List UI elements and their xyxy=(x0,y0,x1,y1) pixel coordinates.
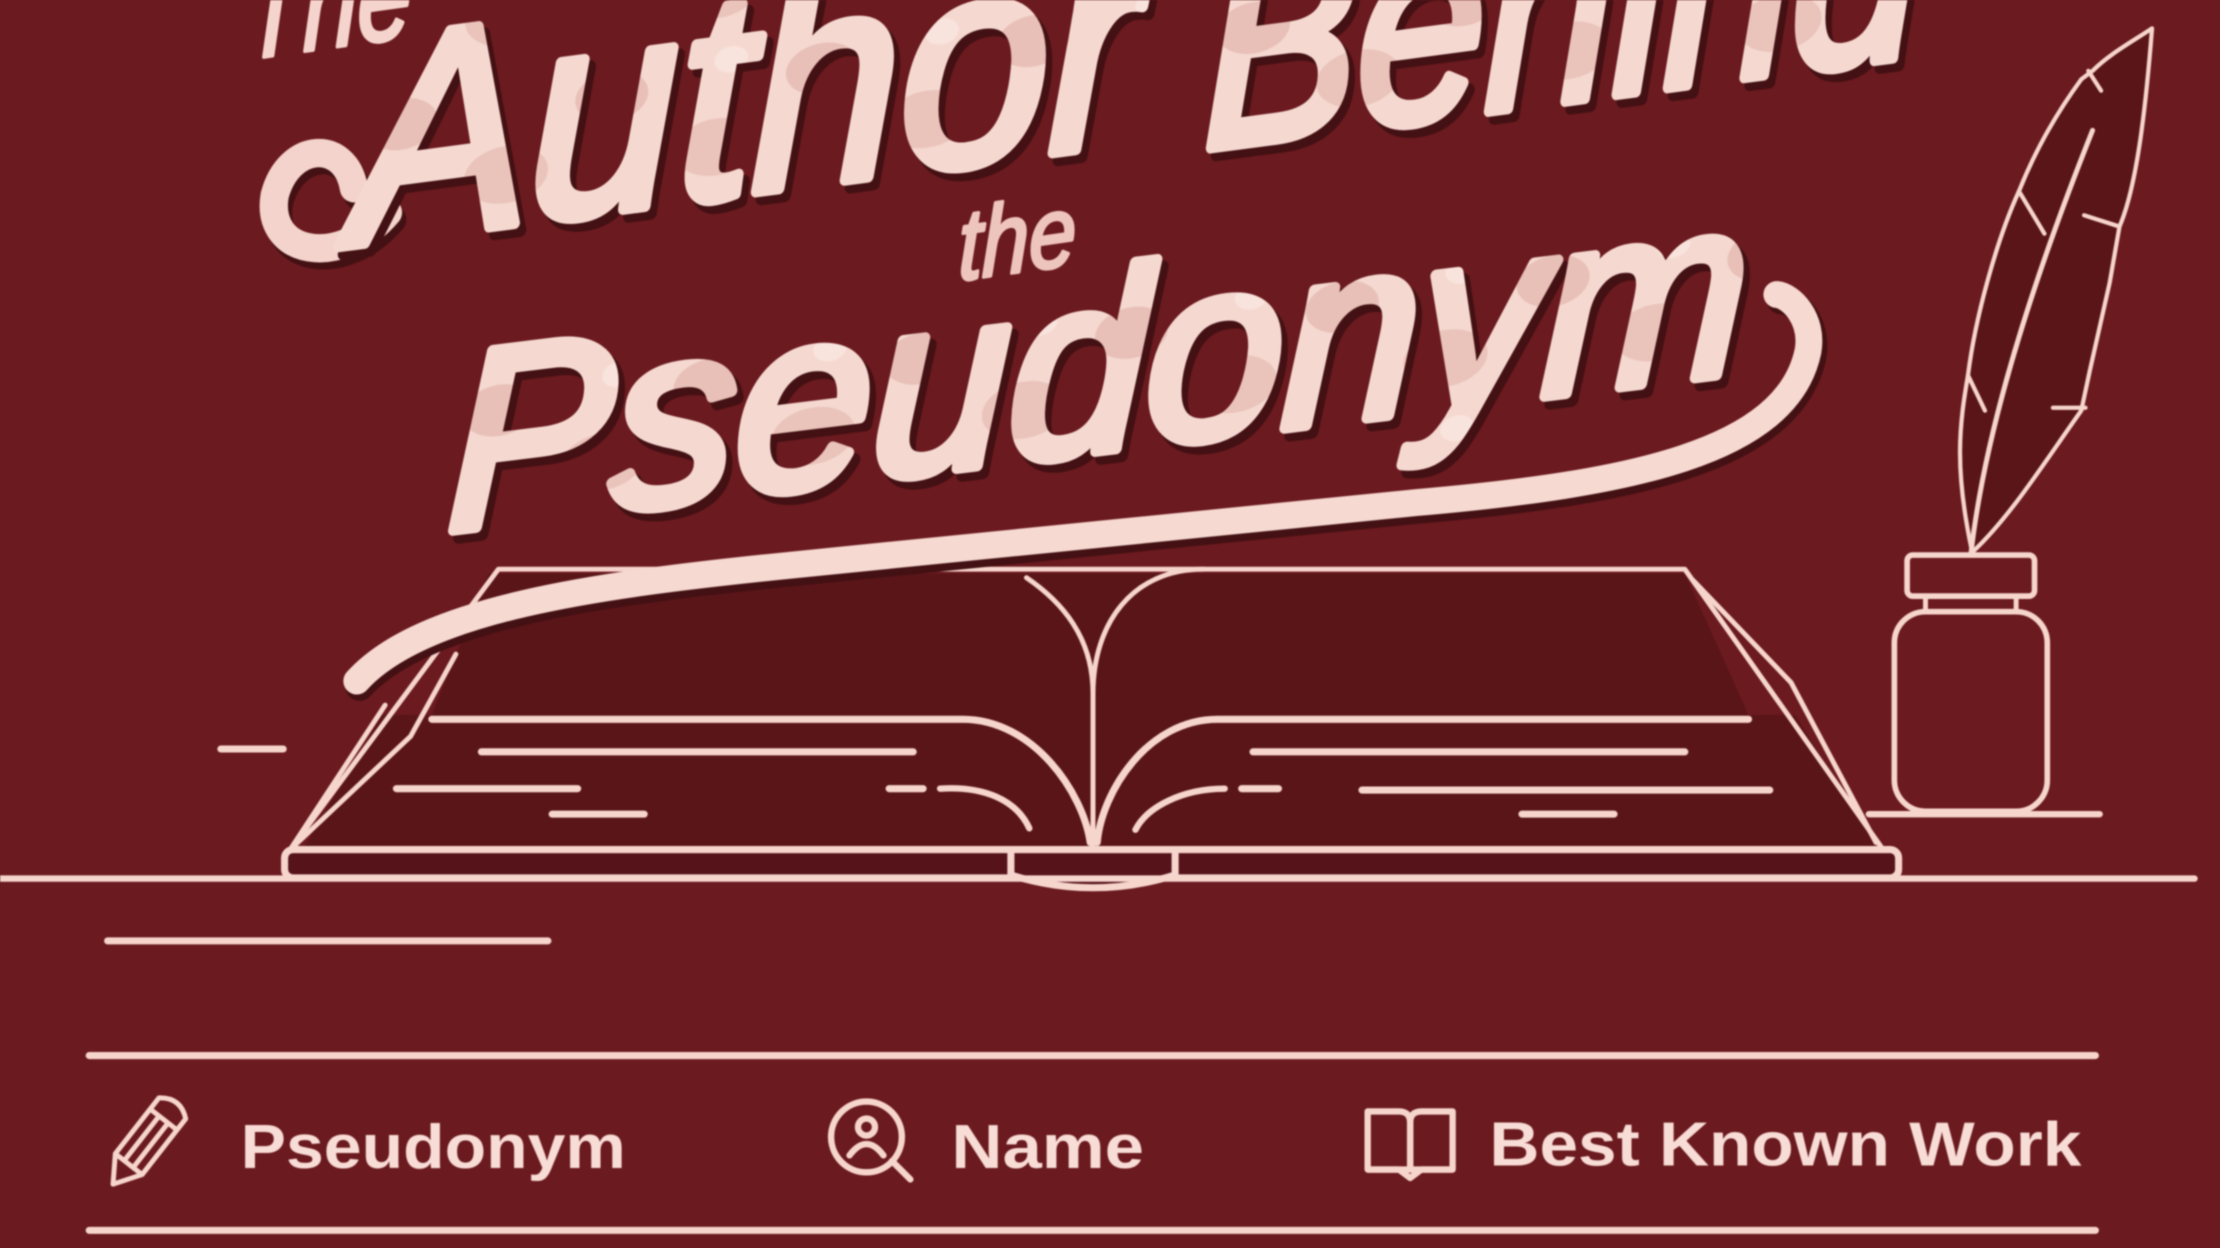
title word: the: the xyxy=(959,174,1076,302)
title swash curl of the A (shadow) xyxy=(278,160,392,255)
title word: Pseudonym (shadow): Pseudonym xyxy=(450,147,1760,592)
illustration: ink jar xyxy=(1869,555,2100,814)
label: Pseudonym: Pseudonym xyxy=(241,1113,626,1182)
title: The Author Behind the Pseudonym xyxy=(244,0,1936,687)
illustration: quill feather xyxy=(1960,28,2152,555)
legend top rule xyxy=(89,1053,2095,1058)
legend xyxy=(100,1092,2082,1195)
icon: magnifier with person xyxy=(831,1102,910,1179)
legend bottom rule xyxy=(89,1228,2095,1233)
label: Best Known Work: Best Known Work xyxy=(1489,1110,2082,1179)
icon: pencil xyxy=(100,1092,190,1195)
title swash underline xyxy=(357,295,1813,687)
illustration: desk line xyxy=(0,876,2195,881)
icon: open book xyxy=(1368,1111,1453,1178)
title word: Pseudonym: Pseudonym xyxy=(444,140,1754,585)
label: Name: Name xyxy=(951,1113,1144,1182)
decorative short rule xyxy=(108,938,548,943)
title swash curl of the A xyxy=(274,153,388,248)
illustration: open book xyxy=(221,569,1899,888)
